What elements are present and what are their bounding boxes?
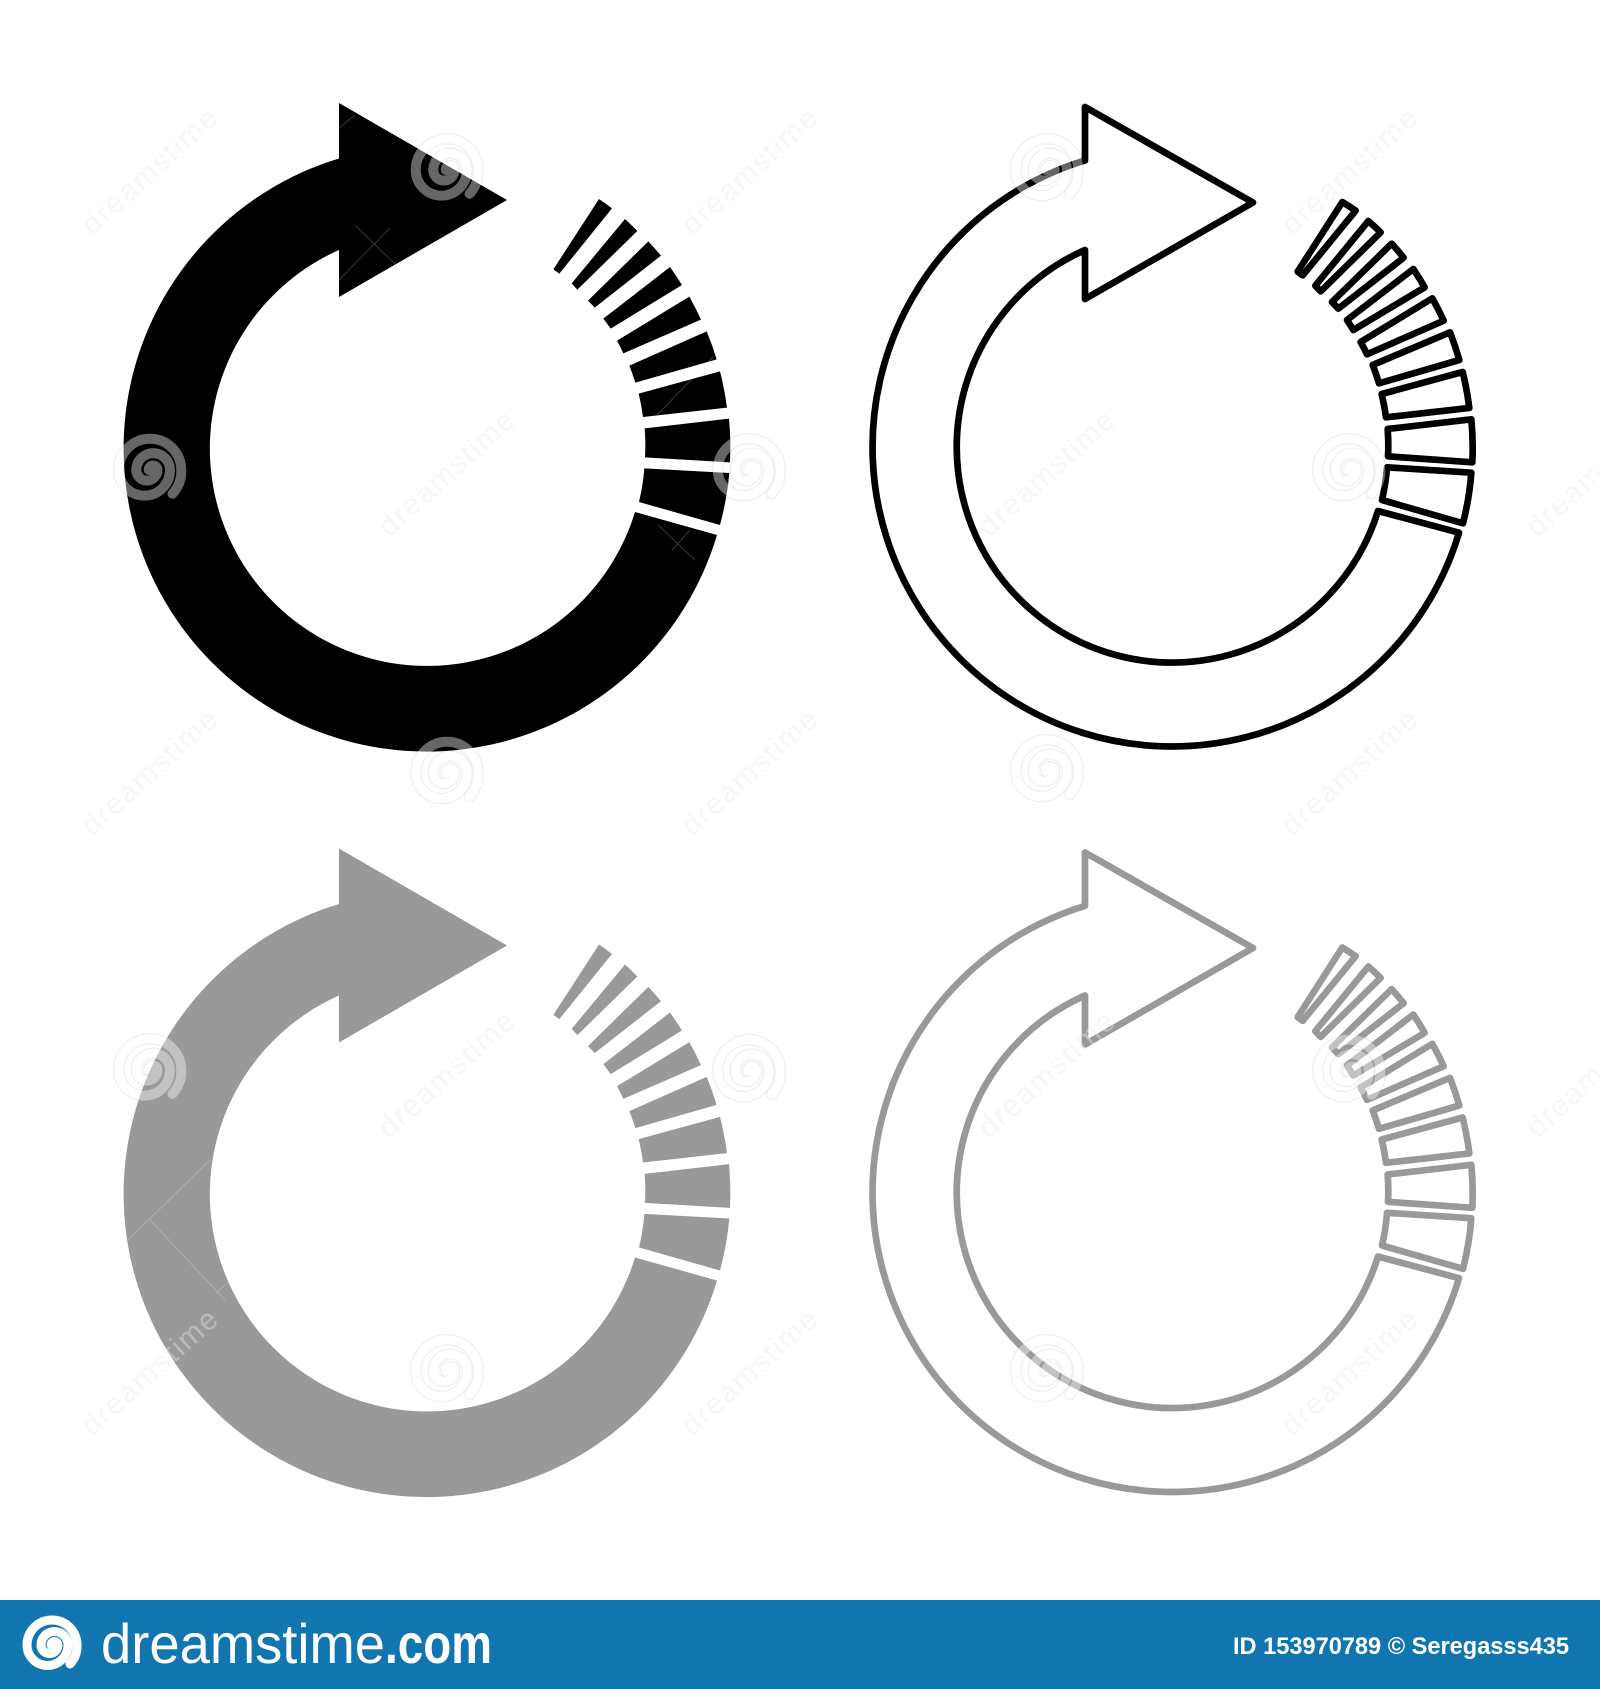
outlined ring segments [1298, 202, 1473, 523]
watermark text: dreamstime [972, 1005, 1122, 1144]
brand name: dreamstime [101, 1612, 385, 1675]
arrow ring body [124, 158, 717, 752]
watermark text: dreamstime [675, 1303, 825, 1442]
footer band [0, 1600, 1600, 1689]
arrow head [339, 103, 507, 297]
watermark text: dreamstime [372, 404, 522, 543]
watermark text: dreamstime [75, 703, 225, 842]
gray arrow head [339, 848, 507, 1042]
brand name: .com [385, 1612, 492, 1675]
watermark text: dreamstime [1275, 102, 1425, 241]
watermark text: dreamstime [75, 102, 225, 241]
icon: solid gray circular arrow [124, 848, 730, 1497]
watermark text: dreamstime [75, 1303, 225, 1442]
gray ring segments [553, 944, 730, 1270]
watermark cross lines [128, 115, 713, 1300]
outline arrow body and head [873, 107, 1459, 746]
icon: gray outline circular arrow [873, 852, 1473, 1492]
watermark text [75, 102, 1600, 1442]
icon: spiral logo [27, 1620, 77, 1665]
fading ring segments [553, 199, 730, 525]
watermark text: dreamstime [1275, 1303, 1425, 1442]
watermark spirals on white background [119, 139, 1380, 1397]
watermark text: dreamstime [972, 404, 1122, 543]
watermark text: dreamstime [372, 1005, 522, 1144]
watermark text: dreamstime [675, 703, 825, 842]
watermark text: dreamstime [675, 102, 825, 241]
gray outlined ring segments [1298, 947, 1473, 1269]
watermark text: dreamstime [1275, 703, 1425, 842]
icon: solid black circular arrow [124, 103, 730, 752]
watermark spirals over the icons [119, 139, 1380, 1397]
gray arrow ring body [124, 904, 717, 1497]
icon: black outline circular arrow [873, 107, 1473, 746]
image id and credit: ID 153970789 © Seregasss435 [1233, 1634, 1569, 1660]
gray outline arrow body and head [873, 852, 1459, 1492]
